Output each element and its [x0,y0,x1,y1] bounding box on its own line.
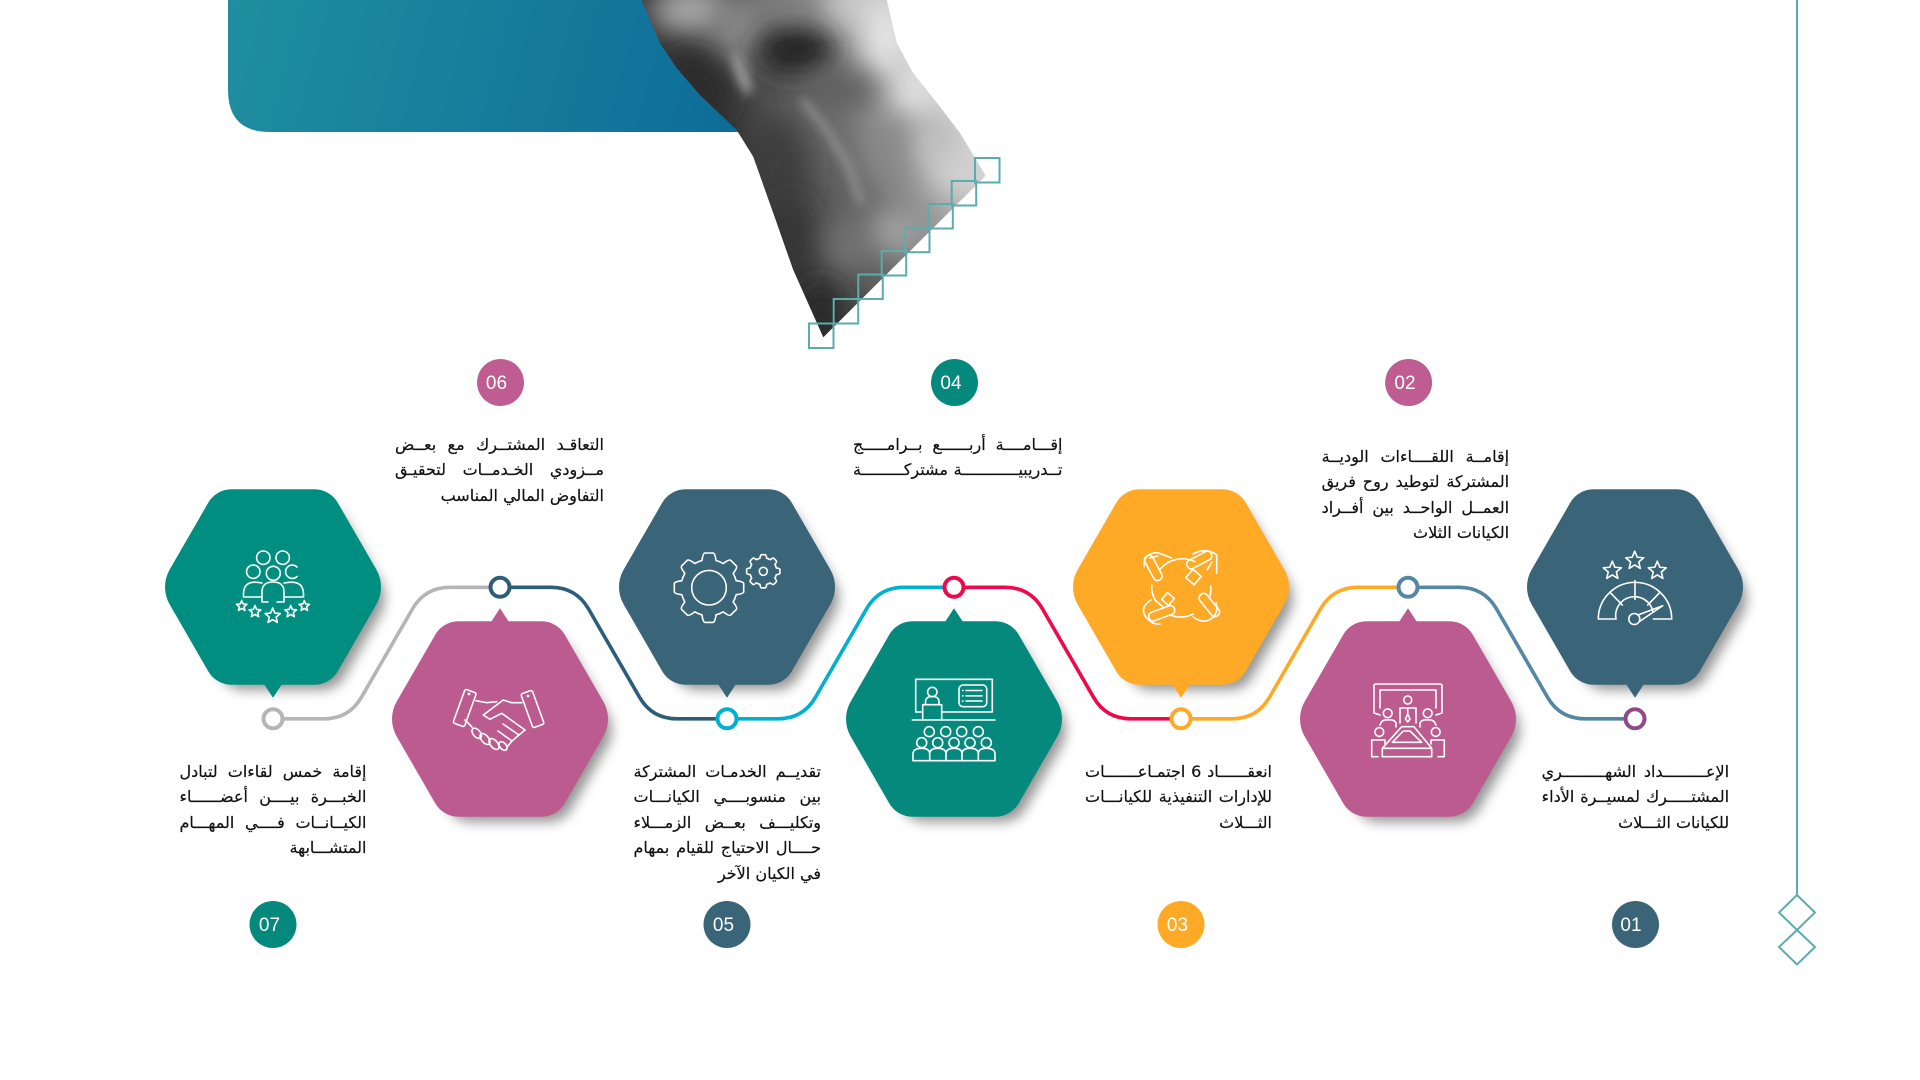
text block 01: للكيانات الثـــلاث [1618,813,1729,832]
icon: gears [674,553,780,622]
text block 02: المشتركة لتوطيد روح فريق [1322,472,1509,491]
text block 05: وتكليـــف بعــض الزمـــلاء [634,813,821,832]
icon: training room [912,679,995,761]
text block 07: إقامة خمس لقاءات لتبادل [180,762,366,781]
number badge 01 [1612,901,1659,948]
hexagon 01 [1527,489,1747,698]
text block 02: إقامــة اللقــــاءات الوديــة [1322,446,1509,466]
hexagon 04 [846,608,1066,822]
text block 06: التعاقـد المشتــرك مع بعــض [395,435,604,454]
text block 07: المتشـــابهة [289,838,366,857]
text block 07: الخبـــرة بيــــن أعضــــــاء [180,787,366,806]
number badge 07 [250,901,296,948]
text block 01 [1542,762,1729,832]
text block 01: الإعـــــــــداد الشهـــــــــري [1542,762,1729,781]
icon: team with stars [236,551,310,622]
number badge 03 [1158,901,1204,948]
number badge 04 [931,359,978,406]
text block 01: المشتـــــرك لمسيــرة الأداء [1542,787,1729,806]
text block 03: الثـــلاث [1219,813,1272,832]
icon: executive meeting [1372,684,1444,757]
number badge 02 [1385,359,1432,406]
number badge 02: 02 [1394,373,1416,394]
number badge 06 [477,359,524,406]
hexagon 05 [619,489,839,698]
text block 02 [1322,446,1509,542]
hexagon 06 [392,608,612,822]
hexagon 03 [1073,489,1293,698]
text block 06 [395,435,604,506]
header banner [228,0,780,132]
number badge 01: 01 [1620,915,1642,936]
text block 03 [1085,762,1272,832]
text block 05 [634,762,821,884]
number badge 04: 04 [940,373,962,394]
text block 05: حــــال الاحتياج للقيام بمهام [634,838,821,857]
text block 05: بين منسوبــــي الكيانـــات [634,787,821,806]
text block 04 [853,434,1062,480]
text block 02: الكيانات الثلاث [1413,523,1509,542]
text block 02: العمــل الواحــد بين أفــراد [1322,498,1509,516]
text block 06: مــزودي الخـدمــات لتحقيـق [395,460,604,479]
text block 03: انعقــــــاد 6 اجتمـاعـــــــات [1085,762,1272,781]
text block 03: للإدارات التنفيذية للكيانـــات [1085,787,1272,806]
timeline connectors [273,587,1635,719]
text block 04: تــدريبيــــــــــــة مشتركـــــــــة [853,460,1062,479]
text block 07: الكيــانــات فــــي المهـــام [180,813,366,832]
text block 05: في الكيان الآخر [718,864,821,883]
hexagon 07 [165,489,385,698]
icon: team collaboration [1143,550,1221,624]
text block 07 [180,762,366,857]
text block 06: التفاوض المالي المناسب [441,486,604,505]
number badge 05 [704,901,750,948]
text block 04: إقـــامــــة أربــــــع بــرامـــــج [853,435,1062,454]
icon: handshake [453,689,544,752]
number badge 07: 07 [259,915,280,936]
text block 05: تقديــم الخدمـات المشتركة [634,762,821,781]
icon: performance gauge [1598,551,1672,624]
number badge 05: 05 [713,915,734,936]
timeline nodes [264,578,1644,728]
stair squares [809,158,1000,348]
number badge 06: 06 [486,373,507,394]
number badge 03: 03 [1167,915,1188,936]
vertical rule with diamonds [1779,0,1815,964]
hexagon 02 [1300,608,1520,822]
forearm photo [640,0,1000,342]
